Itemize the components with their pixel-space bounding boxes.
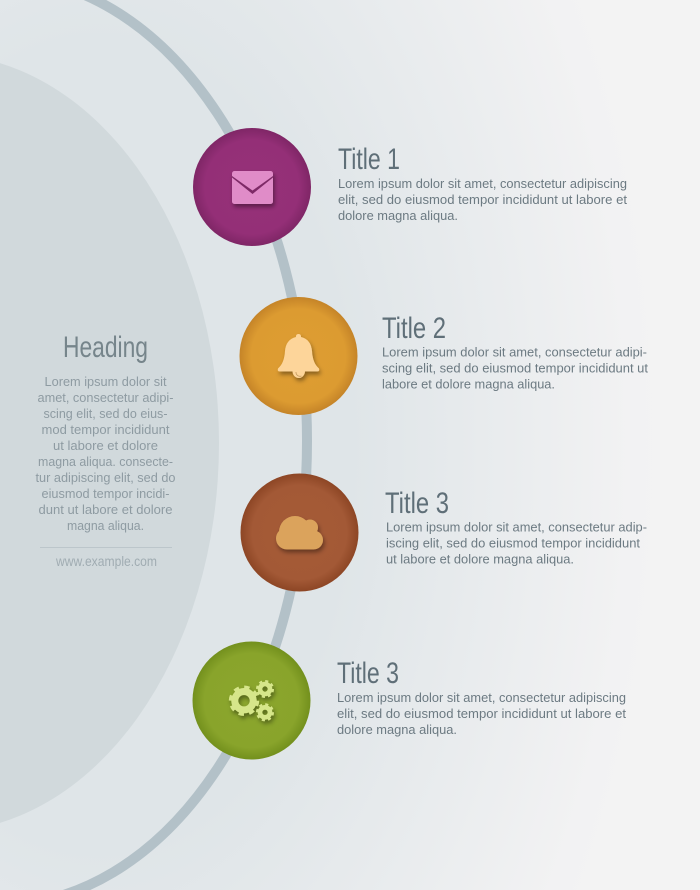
text block 1: Lorem ipsum dolor sit amet, consectetur adipiscing bbox=[338, 177, 627, 191]
heading body text: Lorem ipsum dolor sit bbox=[44, 375, 167, 389]
icon: envelope bbox=[232, 171, 273, 204]
heading body text: scing elit, sed do eius- bbox=[44, 407, 168, 421]
text block 2 bbox=[382, 312, 649, 392]
panel: left heading ellipse bbox=[0, 54, 219, 832]
circle 4: gears bbox=[192, 642, 310, 760]
heading body text bbox=[36, 375, 176, 533]
text block 4 bbox=[337, 657, 627, 737]
text block 1 bbox=[338, 143, 628, 223]
icon: cloud bbox=[276, 516, 323, 550]
heading body text: mod tempor incididunt bbox=[42, 423, 170, 437]
text block 3: Lorem ipsum dolor sit amet, consectetur adip- bbox=[386, 520, 647, 534]
text block 1: Title 1 bbox=[338, 143, 400, 176]
text block 3 bbox=[385, 487, 647, 566]
text block 4: Title 3 bbox=[337, 657, 399, 690]
text block 2: scing elit, sed do eiusmod tempor incididunt ut bbox=[382, 362, 649, 376]
text block 3: iscing elit, sed do eiusmod tempor incididunt bbox=[386, 536, 641, 550]
text block 1: elit, sed do eiusmod tempor incididunt ut labore et bbox=[338, 193, 628, 207]
circle 3: cloud bbox=[240, 474, 358, 592]
text block 3: ut labore et dolore magna aliqua. bbox=[386, 552, 574, 566]
icon: gears bbox=[230, 681, 273, 720]
text block 4: dolore magna aliqua. bbox=[337, 723, 457, 737]
text block 4: elit, sed do eiusmod tempor incididunt ut labore et bbox=[337, 707, 627, 721]
heading: Heading bbox=[63, 331, 148, 364]
heading body text: amet, consectetur adipi- bbox=[38, 391, 174, 405]
heading body text: magna aliqua. consecte- bbox=[38, 455, 173, 469]
text block 2: Title 2 bbox=[382, 312, 446, 345]
text block 1: dolore magna aliqua. bbox=[338, 209, 458, 223]
heading body text: tur adipiscing elit, sed do bbox=[36, 471, 176, 485]
icon: bell bbox=[278, 334, 319, 378]
website link: www.example.com bbox=[55, 553, 157, 569]
circle 2: bell bbox=[240, 297, 358, 415]
circle 1: envelope bbox=[193, 128, 311, 246]
text block 2: labore et dolore magna aliqua. bbox=[382, 378, 555, 392]
text block 3: Title 3 bbox=[385, 487, 449, 520]
heading body text: dunt ut labore et dolore bbox=[38, 503, 173, 517]
heading body text: magna aliqua. bbox=[67, 519, 144, 533]
text block 2: Lorem ipsum dolor sit amet, consectetur adipi- bbox=[382, 346, 647, 360]
heading body text: ut labore et dolore bbox=[53, 439, 158, 453]
text block 4: Lorem ipsum dolor sit amet, consectetur adipiscing bbox=[337, 691, 626, 705]
heading body text: eiusmod tempor incidi- bbox=[42, 487, 170, 501]
connecting arc bbox=[0, 0, 307, 890]
